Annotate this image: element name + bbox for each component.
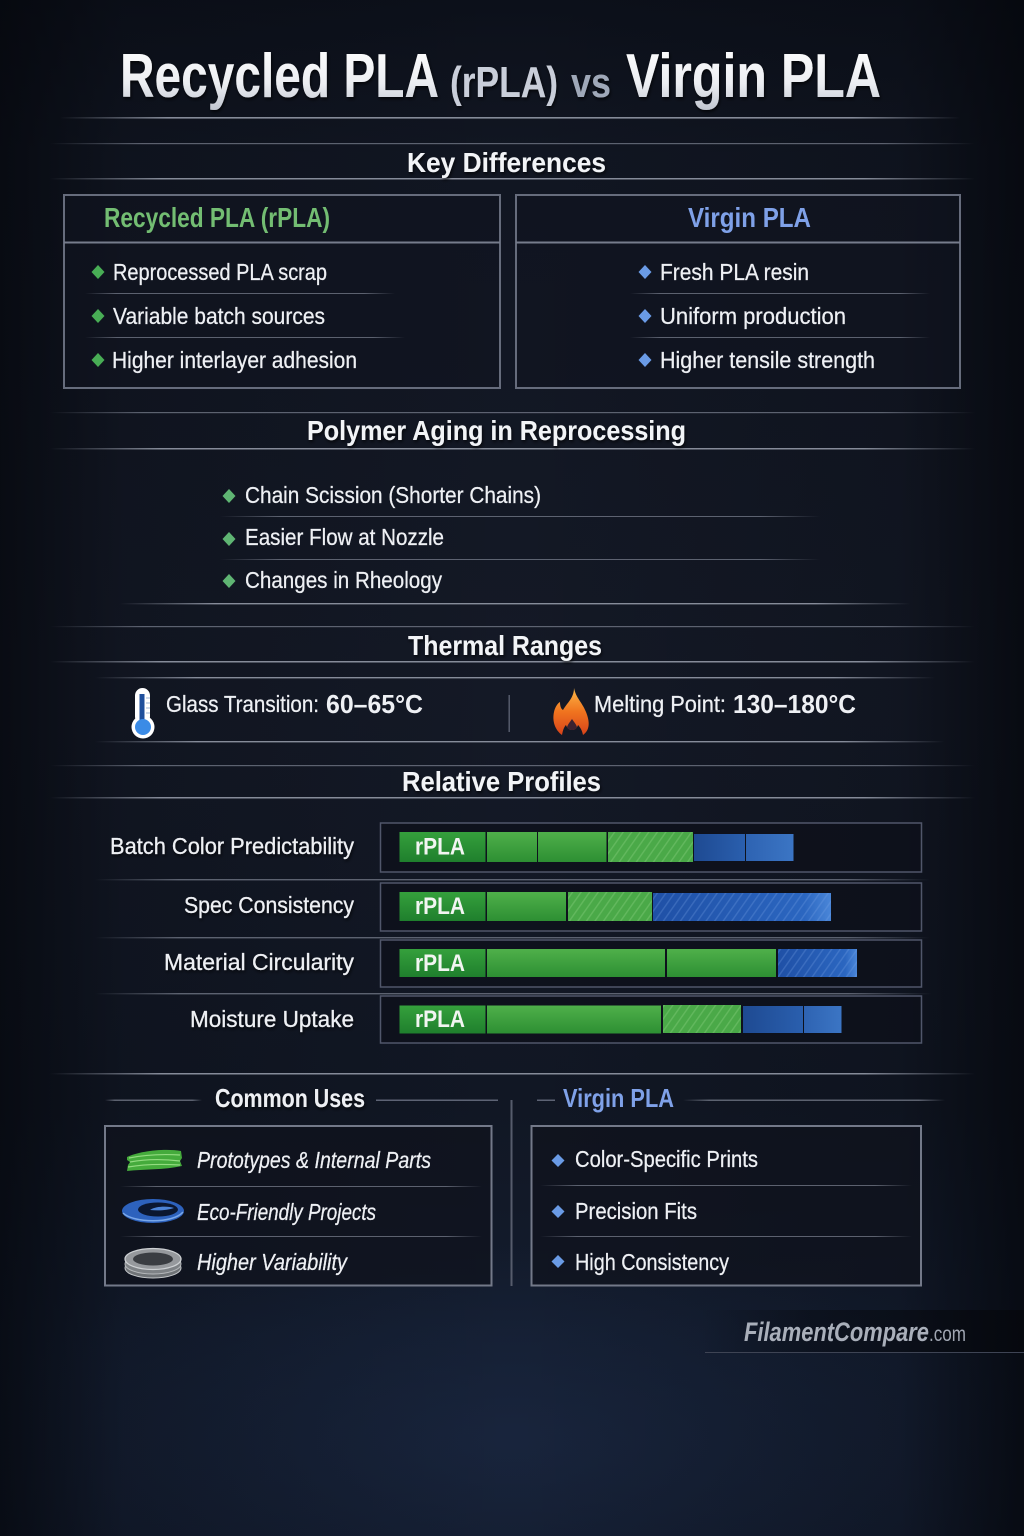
section: key differences bbox=[50, 143, 975, 388]
panel: recycled PLA: Recycled PLA (rPLA) bbox=[104, 202, 330, 233]
section: thermal ranges: Glass Transition: bbox=[166, 691, 319, 717]
panel: common uses list: Higher Variability bbox=[197, 1249, 348, 1275]
icon: green filament bbox=[127, 1150, 182, 1171]
panel: common uses list bbox=[105, 1126, 492, 1286]
section: polymer aging: Easier Flow at Nozzle bbox=[245, 524, 444, 550]
section: thermal ranges: Melting Point: bbox=[594, 691, 726, 717]
icon: blue filament bbox=[122, 1199, 184, 1223]
title: (rPLA) bbox=[450, 58, 558, 107]
panel: recycled PLA: Higher interlayer adhesion bbox=[112, 347, 357, 373]
footer: brand bbox=[700, 1310, 1024, 1353]
section: thermal ranges: 60–65°C bbox=[326, 689, 423, 719]
heading: thermal ranges: Thermal Ranges bbox=[408, 630, 602, 661]
panel: common uses list: Prototypes & Internal Parts bbox=[197, 1147, 431, 1173]
panel: virgin PLA: Virgin PLA bbox=[688, 202, 811, 233]
section: polymer aging: Chain Scission (Shorter Chains) bbox=[245, 482, 541, 508]
heading: key differences: Key Differences bbox=[407, 147, 606, 178]
row: moisture uptake: Moisture Uptake bbox=[190, 1006, 354, 1032]
panel: common uses list: Eco-Friendly Projects bbox=[197, 1199, 376, 1225]
section: relative profiles bbox=[50, 765, 975, 1043]
icon: gray filament bbox=[125, 1248, 181, 1278]
panel: virgin PLA: Uniform production bbox=[660, 303, 846, 329]
icon: flame bbox=[553, 688, 589, 735]
row: spec consistency bbox=[184, 883, 922, 931]
row: material circularity bbox=[164, 940, 922, 987]
icon: thermometer bbox=[132, 688, 154, 738]
row: moisture uptake: rPLA bbox=[415, 1006, 465, 1033]
row: batch color predictability bbox=[110, 823, 922, 872]
row: spec consistency: rPLA bbox=[415, 893, 465, 920]
title bbox=[120, 42, 881, 111]
section: polymer aging: Changes in Rheology bbox=[245, 567, 442, 593]
heading: common uses: Common Uses bbox=[215, 1083, 365, 1113]
row: batch color predictability: rPLA bbox=[415, 834, 465, 860]
panel: virgin PLA uses list: High Consistency bbox=[575, 1249, 729, 1275]
row: batch color predictability: Batch Color Predictability bbox=[110, 833, 354, 859]
title: vs bbox=[571, 59, 611, 106]
panel: recycled PLA: Reprocessed PLA scrap bbox=[113, 259, 327, 285]
panel: recycled PLA: Variable batch sources bbox=[113, 303, 325, 329]
row: spec consistency: Spec Consistency bbox=[184, 892, 354, 918]
section: thermal ranges: 130–180°C bbox=[733, 689, 856, 719]
section: thermal ranges bbox=[50, 626, 975, 742]
footer: brand: FilamentCompare bbox=[744, 1317, 929, 1347]
title: Virgin PLA bbox=[626, 42, 881, 111]
panel: virgin PLA uses list: Precision Fits bbox=[575, 1198, 697, 1224]
section: polymer aging bbox=[50, 412, 975, 604]
footer: brand: .com bbox=[929, 1323, 966, 1346]
panel: virgin PLA: Fresh PLA resin bbox=[660, 259, 809, 285]
row: material circularity: rPLA bbox=[415, 950, 465, 977]
panel: recycled PLA bbox=[64, 195, 500, 388]
panel: virgin PLA uses list: Color-Specific Prints bbox=[575, 1146, 758, 1172]
title: Recycled PLA bbox=[120, 42, 439, 111]
row: moisture uptake bbox=[190, 996, 922, 1043]
heading: relative profiles: Relative Profiles bbox=[402, 766, 601, 797]
heading: polymer aging: Polymer Aging in Reprocessing bbox=[307, 415, 686, 446]
panel: virgin PLA uses list bbox=[532, 1126, 921, 1286]
section: common uses bbox=[50, 1073, 975, 1286]
row: material circularity: Material Circularity bbox=[164, 949, 354, 975]
panel: virgin PLA bbox=[516, 195, 960, 388]
heading: virgin PLA uses: Virgin PLA bbox=[563, 1083, 674, 1113]
panel: virgin PLA: Higher tensile strength bbox=[660, 347, 875, 373]
